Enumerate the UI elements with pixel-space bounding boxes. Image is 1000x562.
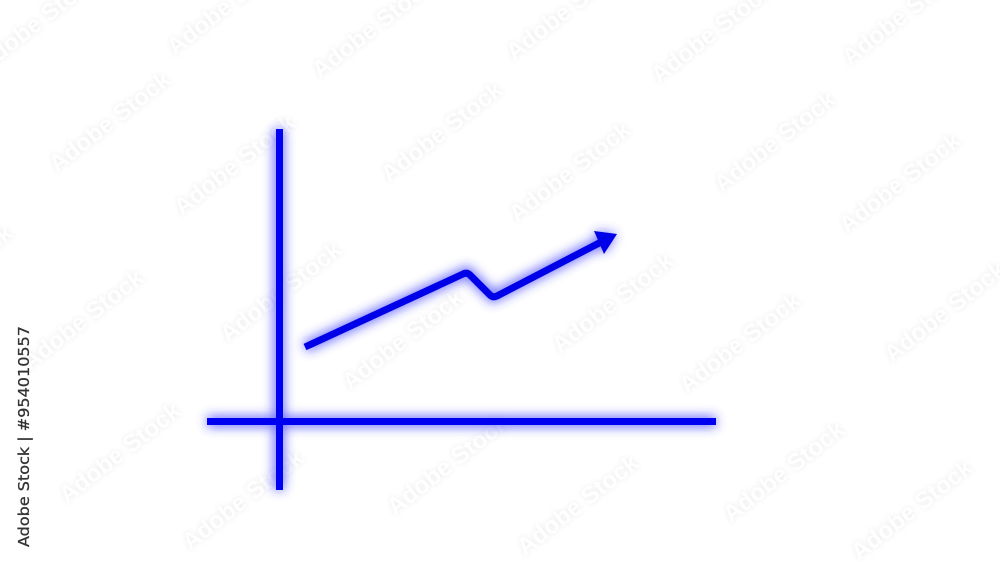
watermark pattern: Adobe Stock — [504, 116, 637, 228]
watermark pattern: Adobe Stock — [169, 109, 302, 221]
watermark pattern: Adobe Stock — [376, 76, 509, 188]
watermark pattern: Adobe Stock — [709, 86, 842, 198]
x axis — [207, 418, 716, 425]
watermark pattern: Adobe Stock — [512, 449, 645, 561]
watermark pattern: Adobe Stock — [718, 416, 851, 528]
watermark pattern: Adobe Stock — [337, 284, 470, 396]
watermark pattern: Adobe Stock — [54, 397, 187, 509]
watermark pattern: Adobe Stock — [17, 264, 150, 376]
watermark pattern: Adobe Stock — [44, 66, 177, 178]
stock id caption: Adobe Stock | #954010557 — [15, 326, 33, 547]
watermark pattern: Adobe Stock — [215, 236, 348, 348]
watermark pattern: Adobe Stock — [177, 444, 310, 556]
rising trend arrow — [305, 231, 617, 347]
watermark pattern: Adobe Stock — [547, 247, 680, 359]
watermark pattern: Adobe Stock — [674, 287, 807, 399]
y axis — [276, 129, 283, 490]
chart glow — [207, 129, 716, 490]
watermark pattern: Adobe Stock — [382, 409, 515, 521]
watermark pattern: Adobe Stock — [834, 127, 967, 239]
